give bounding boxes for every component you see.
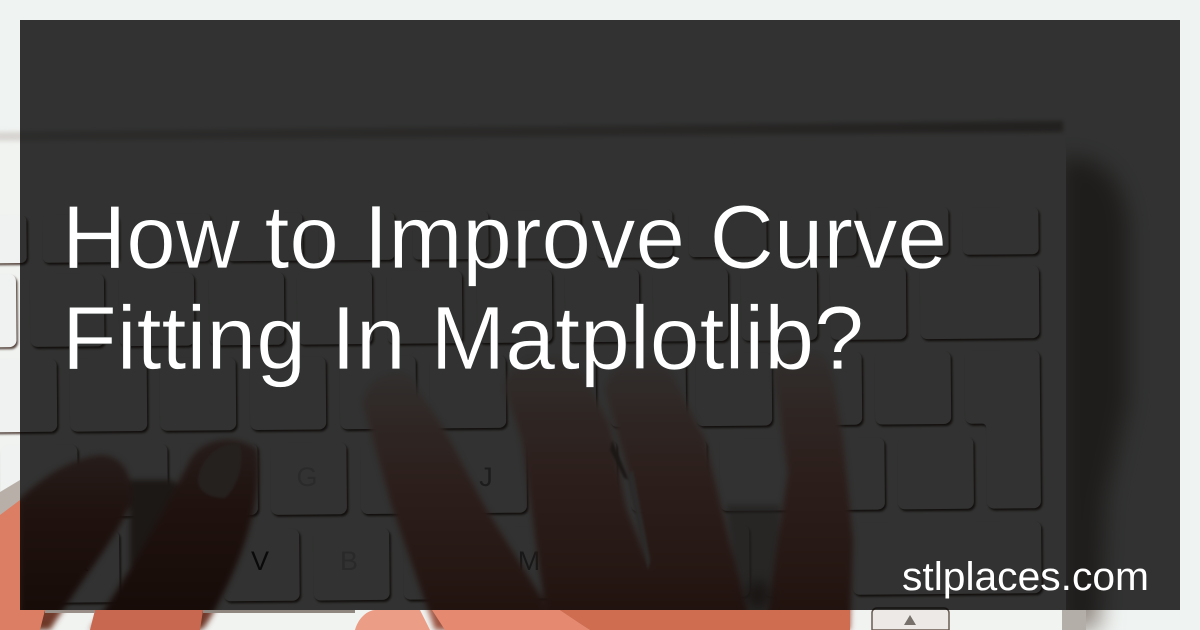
key legends: B [340, 546, 358, 576]
palm edge bottom left [0, 500, 20, 630]
hands [0, 352, 853, 630]
fingernail [198, 444, 242, 498]
dark spot at hand base [746, 581, 770, 609]
key legends: J [479, 462, 493, 492]
title [62, 188, 947, 389]
little finger [765, 352, 853, 630]
keyboard rear edge [0, 121, 1063, 141]
keyboard body [0, 123, 1066, 630]
second finger [90, 440, 258, 630]
keys [0, 206, 1043, 606]
shadow strip at bottom right [1062, 610, 1086, 630]
shadow right of keyboard [1060, 158, 1128, 630]
finger shadows on keyboard [130, 480, 250, 610]
ring finger [505, 357, 660, 630]
bottom edge of keyboard [45, 610, 95, 613]
title line 2: Fitting In Matplotlib? [62, 289, 864, 389]
key legends: G [296, 462, 318, 492]
key legends: V [251, 546, 269, 576]
arrow key legend [904, 615, 916, 625]
dark slit between fingers [610, 440, 630, 480]
title line 1: How to Improve Curve [62, 188, 947, 288]
key legends: X [71, 547, 89, 577]
strips of bright skin at the frame edges [0, 480, 850, 630]
fourth finger [605, 359, 753, 630]
key legends: M [518, 546, 540, 576]
lower arrow key [872, 608, 949, 630]
middle finger [364, 373, 548, 630]
left finger [0, 455, 131, 630]
light gap between fingers [627, 470, 650, 570]
site name: stlplaces.com [902, 555, 1149, 599]
key legends [71, 462, 540, 577]
